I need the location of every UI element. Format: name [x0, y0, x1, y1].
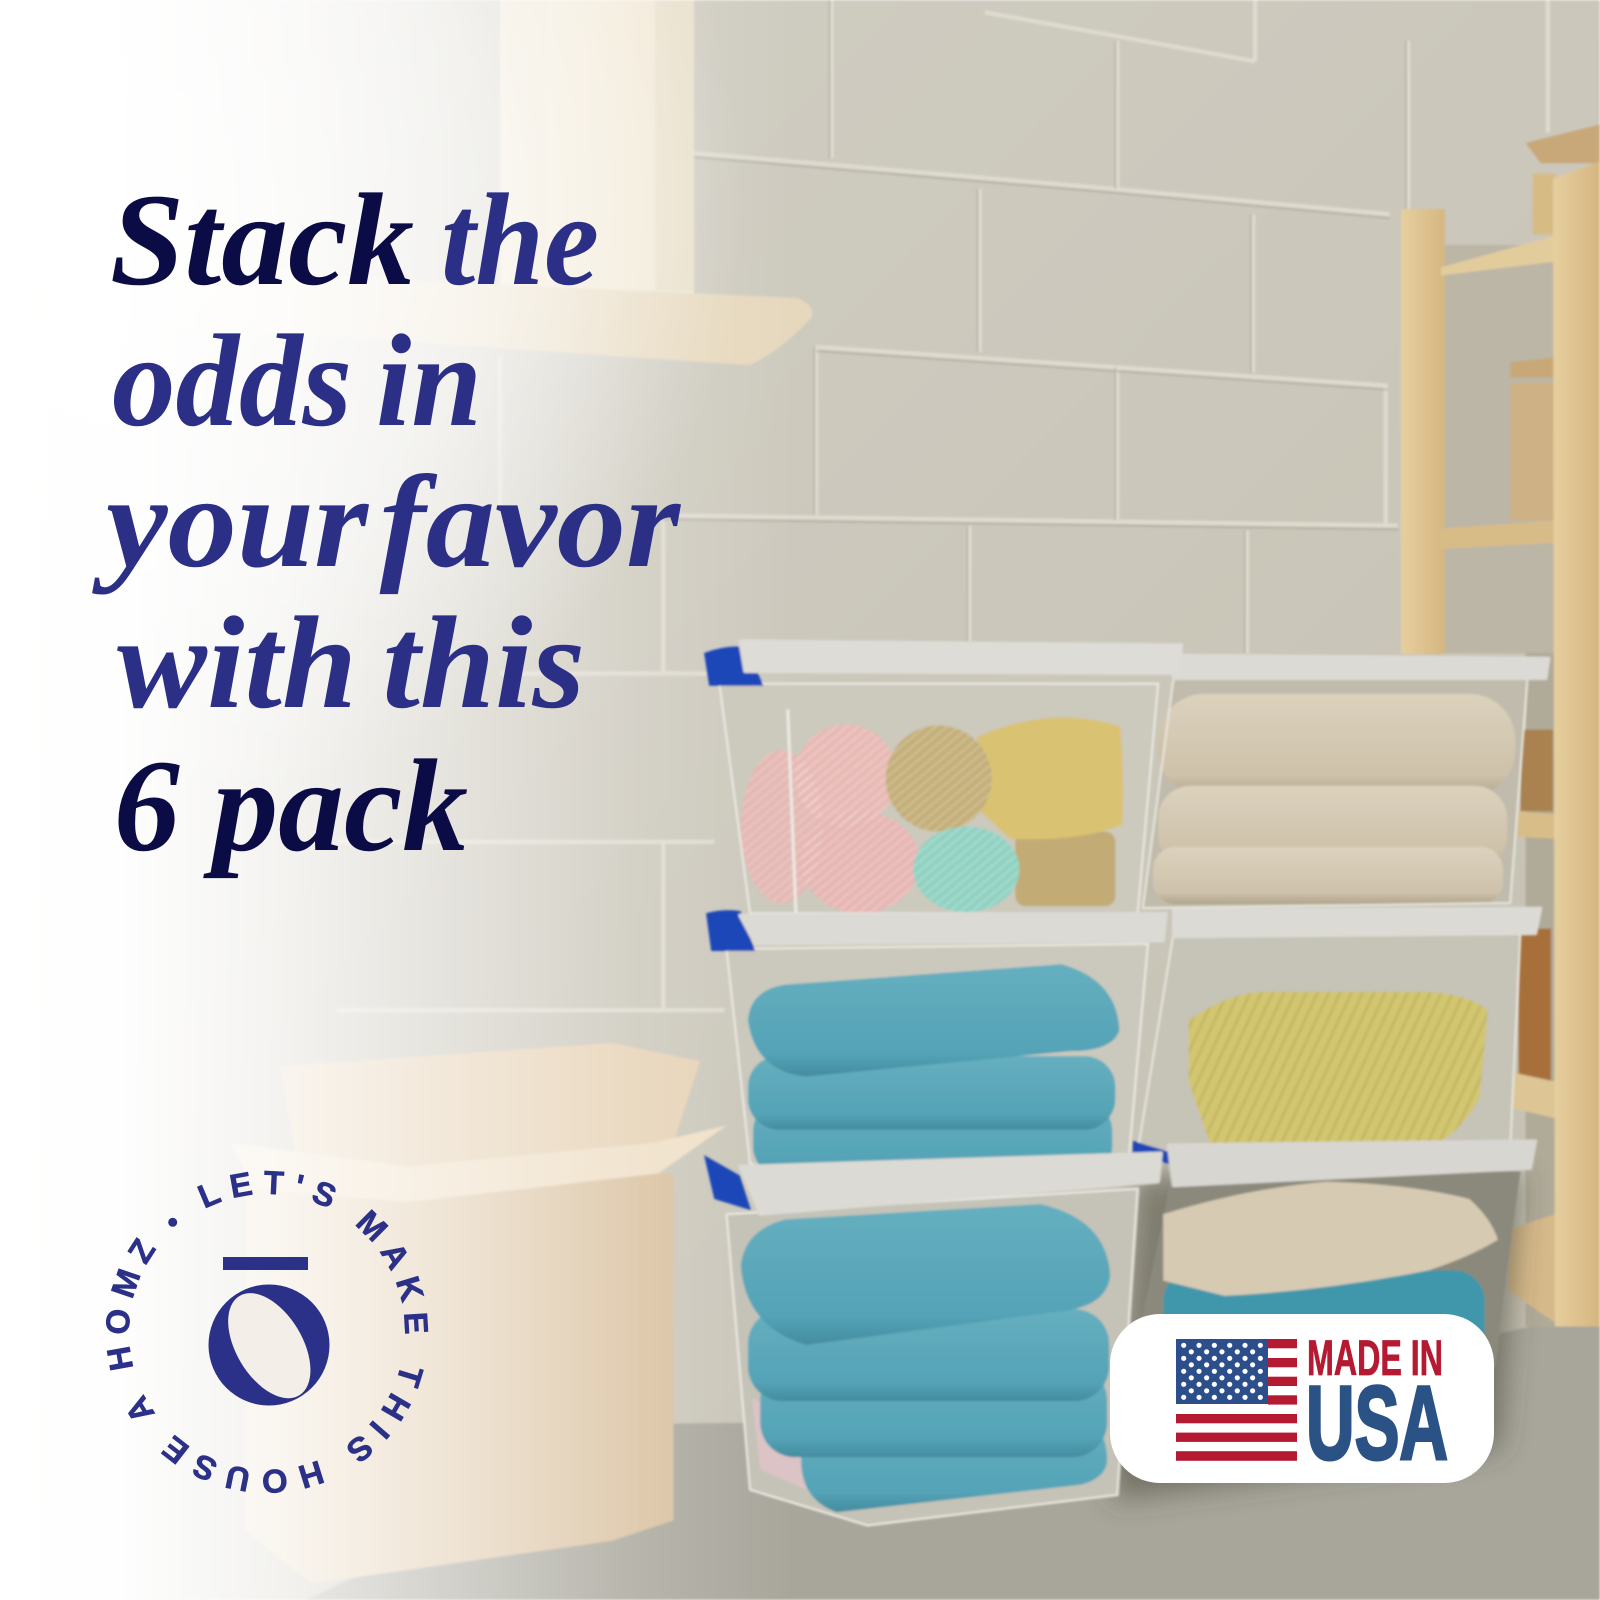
bin: top right with beige blankets [1143, 655, 1549, 908]
heading word: Stack: Stack [110, 166, 414, 313]
heading line: with this: with this [117, 589, 585, 736]
american flag [1176, 1339, 1297, 1461]
yarn: yellow cylinder [974, 717, 1123, 906]
window frame [500, 0, 694, 296]
badge: made in USA [1110, 1314, 1494, 1483]
window ledge [0, 245, 812, 365]
bin: middle right with yellow basket [1138, 908, 1541, 1155]
bin: middle left with blue blankets [706, 910, 1166, 1184]
brick mortar lines [337, 0, 1548, 1010]
yarn: teal ball [913, 827, 1019, 912]
text: USA: USA [1306, 1365, 1448, 1482]
text: MADE IN: MADE IN [1307, 1330, 1443, 1386]
floor [306, 1327, 1600, 1600]
heading line: your favor: your favor [91, 448, 682, 595]
bin: bottom left with blue blankets [704, 1153, 1161, 1525]
heading word: the: the [441, 166, 599, 313]
circular brand logo [106, 1170, 428, 1494]
heading line: odds in: odds in [112, 307, 482, 454]
badge background [1110, 1314, 1494, 1483]
heading: Stack the odds in your favor with this 6 pack [91, 166, 682, 879]
wood shelf unit [1401, 124, 1600, 1429]
bin: bottom right with pillow and blue blanket [1133, 1141, 1536, 1372]
bin: top left with yarn balls [704, 641, 1182, 913]
yarn: pink balls [741, 724, 919, 913]
ring slogan text: LET'S MAKE THIS HOUSE A HOMZ [106, 1170, 428, 1494]
shadow behind lower bins [1112, 1173, 1520, 1500]
ring dot [168, 1218, 177, 1227]
white left fade overlay [0, 0, 796, 1600]
yarn: tan ball [886, 726, 992, 832]
logo letter o [208, 1279, 330, 1412]
heading line: 6 pack: 6 pack [114, 732, 468, 879]
cardboard box [230, 1043, 727, 1584]
logo macron bar [223, 1257, 308, 1270]
